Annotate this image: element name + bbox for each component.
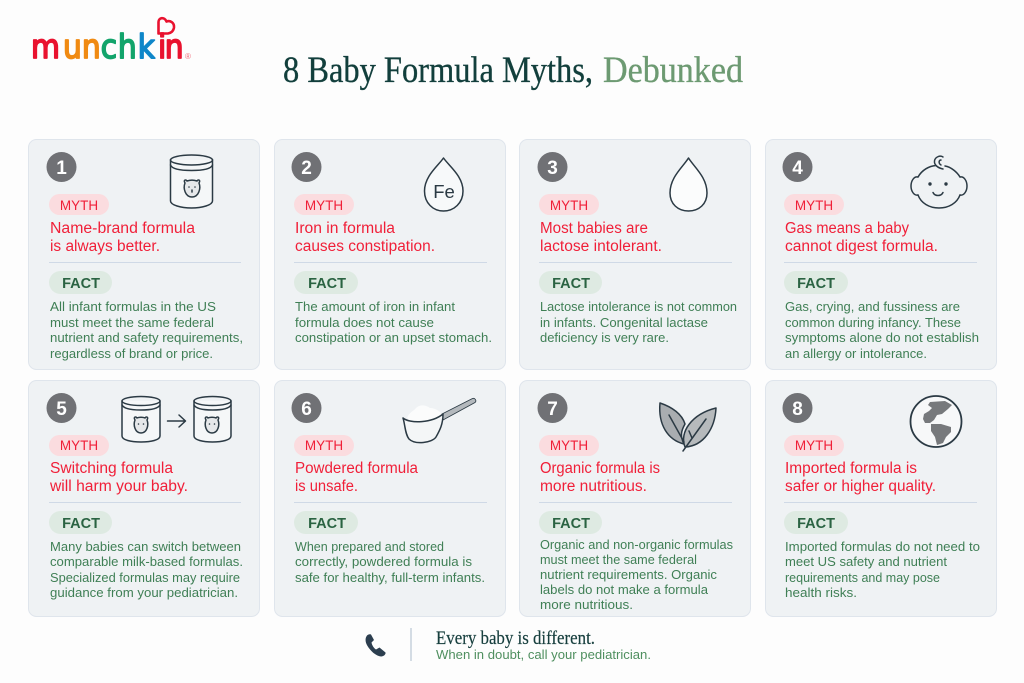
icon: milk drop	[670, 158, 707, 211]
fact label	[784, 511, 848, 534]
fact text: All infant formulas in the US	[50, 299, 216, 314]
logo: munchkin: munchkin	[31, 29, 184, 66]
fact label	[294, 511, 358, 534]
title: Debunked	[603, 50, 743, 91]
fact text: requirements and may pose	[785, 570, 940, 585]
fact label	[294, 271, 358, 294]
number badge 2: 2	[301, 158, 312, 179]
myth statement: Gas means a baby	[785, 220, 909, 237]
number badge 5	[46, 393, 76, 423]
icon: formula jar with bear	[170, 155, 212, 208]
number badge 2	[292, 152, 322, 182]
fact text: Imported formulas do not need to	[785, 539, 980, 554]
number badge 8: 8	[792, 399, 803, 420]
fact text: labels do not make a formula	[540, 582, 709, 597]
fact label: FACT	[62, 516, 100, 532]
myth statement	[785, 460, 936, 495]
fact label	[539, 271, 602, 294]
number badge 7: 7	[547, 399, 558, 420]
myth statement: is unsafe.	[295, 478, 358, 495]
myth statement	[50, 220, 195, 255]
myth statement	[540, 460, 660, 495]
fact text: must meet the same federal	[50, 315, 214, 330]
fact text: constipation or an upset stomach.	[295, 330, 492, 345]
panel: myth 4	[766, 140, 996, 370]
myth statement: Powdered formula	[295, 460, 418, 477]
fact text: nutrient requirements. Organic	[540, 567, 717, 582]
number badge 6	[292, 393, 322, 423]
fact text: safe for healthy, full-term infants.	[295, 570, 485, 585]
panel: myth 1	[28, 140, 260, 370]
fact text: When prepared and stored	[295, 539, 444, 554]
fact text	[540, 537, 733, 612]
myth label	[49, 435, 109, 456]
title: 8 Baby Formula Myths,	[283, 50, 593, 91]
fact text: meet US safety and nutrient	[785, 554, 947, 569]
fact text: The amount of iron in infant	[295, 299, 455, 314]
fact text: comparable milk-based formulas.	[50, 554, 243, 569]
fact label: FACT	[62, 276, 100, 292]
icon: iron drop	[424, 158, 463, 211]
number badge 4: 4	[792, 158, 803, 179]
number badge 3: 3	[547, 158, 558, 179]
number badge 7	[538, 393, 568, 423]
myth statement: causes constipation.	[295, 238, 435, 255]
myth statement: will harm your baby.	[49, 478, 188, 495]
icon: phone	[366, 634, 386, 656]
fact text	[50, 299, 243, 361]
fact label	[49, 271, 112, 294]
myth statement: Imported formula is	[785, 460, 917, 477]
fact text: Organic and non-organic formulas	[540, 537, 733, 552]
fact label	[784, 271, 848, 294]
footer message: Every baby is different.	[436, 628, 595, 649]
fact text: in infants. Congenital lactase	[540, 315, 708, 330]
fact text: more nutritious.	[540, 597, 633, 612]
icon: globe	[910, 396, 962, 447]
number badge 6: 6	[301, 399, 312, 420]
panel: myth 8	[766, 380, 996, 616]
myth statement	[785, 220, 938, 255]
fact text	[785, 299, 979, 361]
number badge 5: 5	[56, 399, 67, 420]
fact text	[50, 539, 243, 600]
fact label: FACT	[308, 516, 346, 532]
fact text	[540, 299, 737, 345]
myth statement: Organic formula is	[540, 460, 660, 477]
myth statement	[540, 220, 662, 255]
myth statement: Iron in formula	[295, 220, 395, 237]
fact text: health risks.	[785, 585, 857, 600]
myth label	[294, 435, 354, 456]
fact text: Gas, crying, and fussiness are	[785, 299, 960, 314]
number badge 1: 1	[56, 158, 67, 179]
myth statement	[49, 460, 188, 495]
myth label: MYTH	[305, 198, 343, 213]
icon: scoop of powder	[403, 398, 476, 443]
myth statement: is always better.	[50, 238, 160, 255]
myth label: MYTH	[305, 438, 343, 453]
fact label	[49, 511, 112, 534]
icon: iron drop: Fe	[433, 181, 455, 202]
number badge 8	[782, 393, 812, 423]
fact text: symptoms alone do not establish	[785, 330, 979, 345]
panel: myth 5	[28, 380, 260, 616]
fact text: formula does not cause	[295, 315, 434, 330]
fact text: an allergy or intolerance.	[785, 346, 927, 361]
fact text	[785, 539, 980, 600]
icon: baby face	[911, 156, 967, 208]
logo: munchkin: ®	[185, 52, 191, 61]
myth label	[294, 194, 354, 215]
myth statement: safer or higher quality.	[785, 478, 936, 495]
myth label: MYTH	[60, 438, 98, 453]
fact label: FACT	[308, 276, 346, 292]
panel: myth 6	[274, 380, 506, 616]
myth label: MYTH	[795, 198, 833, 213]
fact text: guidance from your pediatrician.	[50, 585, 238, 600]
fact text: Many babies can switch between	[50, 539, 241, 554]
footer message	[436, 628, 651, 662]
fact label	[539, 511, 602, 534]
fact text: Specialized formulas may require	[50, 570, 240, 585]
myth label	[784, 194, 844, 215]
number badge 4	[782, 152, 812, 182]
myth label	[784, 435, 844, 456]
myth label: MYTH	[795, 438, 833, 453]
panel: myth 7	[520, 380, 750, 616]
fact text: nutrient and safety requirements,	[50, 330, 243, 345]
icon: switching jars with arrow	[122, 396, 231, 442]
myth statement: cannot digest formula.	[785, 238, 938, 255]
myth label: MYTH	[60, 198, 98, 213]
fact text: deficiency is very rare.	[540, 330, 669, 345]
fact text: correctly, powdered formula is	[295, 554, 473, 569]
fact text: common during infancy. These	[785, 315, 961, 330]
panel: myth 3	[520, 140, 750, 370]
myth statement	[295, 460, 418, 495]
myth statement: Switching formula	[50, 460, 173, 477]
myth label	[539, 194, 599, 215]
myth statement	[295, 220, 435, 255]
number badge 3	[538, 152, 568, 182]
myth statement: Name-brand formula	[50, 220, 195, 237]
myth statement: more nutritious.	[540, 478, 647, 495]
myth statement: lactose intolerant.	[540, 238, 662, 255]
fact text	[295, 299, 492, 345]
number badge 1	[46, 152, 76, 182]
myth statement: Most babies are	[540, 220, 648, 237]
icon: leaves	[660, 403, 716, 451]
fact text: regardless of brand or price.	[50, 346, 213, 361]
fact text	[295, 539, 485, 585]
panel: myth 2	[274, 140, 506, 370]
fact text: must meet the same federal	[540, 552, 697, 567]
footer message: When in doubt, call your pediatrician.	[436, 647, 651, 662]
fact label: FACT	[552, 276, 590, 292]
fact text: Lactose intolerance is not common	[540, 299, 737, 314]
fact label: FACT	[552, 516, 590, 532]
fact label: FACT	[797, 516, 835, 532]
myth label: MYTH	[550, 198, 588, 213]
myth label	[49, 194, 109, 215]
fact label: FACT	[797, 276, 835, 292]
myth label: MYTH	[550, 438, 588, 453]
myth label	[539, 435, 599, 456]
